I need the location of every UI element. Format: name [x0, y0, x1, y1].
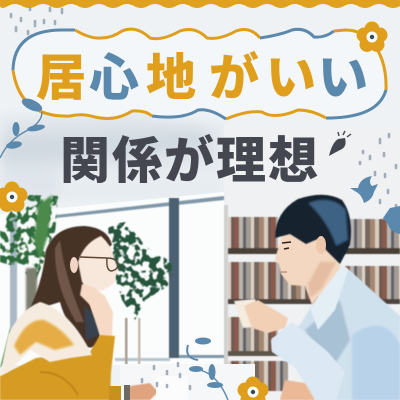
- icon: flower bottom: [238, 376, 268, 400]
- person: woman: [0, 226, 188, 400]
- bookshelves: [228, 217, 400, 391]
- frame segments: [13, 30, 75, 70]
- hair: [275, 195, 351, 264]
- cup: [234, 299, 265, 328]
- face: [275, 215, 340, 305]
- icon: vine bottom: [187, 338, 228, 400]
- photo: blurred cafe scene: [0, 112, 400, 400]
- icon: tulip: [329, 131, 351, 156]
- ear: [70, 257, 78, 273]
- title: 居心地がいい: い: [318, 50, 368, 106]
- wall right: [224, 125, 400, 400]
- arm on table: [280, 380, 315, 400]
- cup: [156, 376, 188, 400]
- window frames: [10, 196, 228, 395]
- sleeve: [271, 322, 345, 400]
- hair: [28, 226, 112, 348]
- crochet shawl: [0, 302, 92, 376]
- top wavy band: [0, 0, 400, 8]
- title: 居心地がいい: [36, 50, 368, 106]
- window light: [0, 192, 224, 365]
- glasses: [80, 257, 118, 271]
- rain dots: top left: [11, 8, 62, 34]
- sweater: [0, 335, 115, 400]
- rain dots: right: [360, 134, 396, 208]
- face: [78, 236, 118, 292]
- icon: bird: [350, 176, 378, 203]
- hand: [244, 300, 288, 333]
- shirt: [272, 266, 400, 400]
- title: 居心地がいい: い: [266, 50, 316, 106]
- mouth: [281, 271, 287, 273]
- person: man: [234, 195, 400, 400]
- icon: flower top right: [356, 22, 388, 52]
- eye and brow: [282, 242, 291, 249]
- table: [120, 364, 255, 400]
- title: 居心地がいい: 地: [146, 50, 196, 106]
- speech frame: wavy title outline: [13, 29, 386, 119]
- title: 居心地がいい: が: [209, 50, 259, 106]
- building exterior: [0, 112, 222, 200]
- title: 居心地がいい: 居: [36, 50, 86, 106]
- plants: [0, 195, 172, 368]
- hand: [80, 284, 113, 336]
- rain dots: bottom: [142, 363, 190, 389]
- icon: flower left: [0, 182, 28, 212]
- ear: [316, 236, 326, 254]
- title: 居心地がいい: 心: [89, 50, 139, 106]
- icon: vine top left: [0, 96, 45, 158]
- woman's hand on cup: [125, 383, 158, 400]
- subtitle: 関係が理想: 関係が理想: [60, 133, 320, 189]
- icon: bird cut at edge: [383, 206, 400, 234]
